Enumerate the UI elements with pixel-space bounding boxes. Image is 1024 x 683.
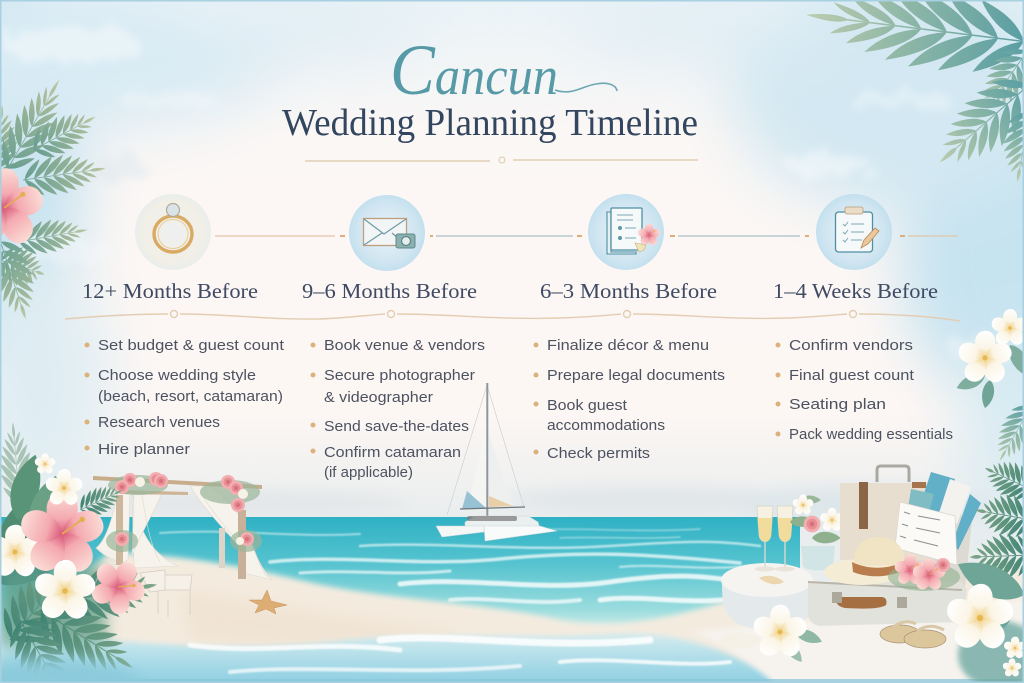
checklist items (84, 338, 284, 458)
vase bouquet (790, 494, 845, 570)
wave foam (160, 529, 760, 602)
icon: envelope and camera (349, 195, 425, 271)
champagne glasses (755, 506, 795, 572)
checklist items: Send save-the-dates (324, 419, 469, 435)
checklist items: & videographer (324, 390, 433, 406)
checklist items: Secure photographer (324, 368, 475, 384)
checklist items: Book venue & vendors (324, 338, 485, 354)
checklist items: Check permits (547, 446, 650, 462)
lid (900, 500, 972, 588)
hibiscus blooms (0, 525, 44, 580)
wedding arch (93, 472, 272, 617)
table with glasses and vase (721, 494, 845, 629)
checklist items: Set budget & guest count (98, 338, 284, 354)
icon: ring (135, 194, 211, 270)
checklist items: Prepare legal documents (547, 368, 725, 384)
script word Cancun: Cancun (390, 30, 558, 110)
checklist items (534, 338, 725, 462)
chair (140, 570, 192, 617)
step heading: 9–6 Months Before (302, 279, 477, 303)
checklist items: Confirm vendors (789, 338, 913, 354)
flower on sand (718, 605, 824, 665)
top right palm fronds (801, 0, 1024, 185)
checklist items: Research venues (98, 415, 220, 431)
title (282, 30, 698, 163)
checklist (895, 502, 957, 565)
sand (0, 552, 1024, 683)
icon: documents and flower (588, 194, 664, 270)
sea (0, 517, 800, 632)
handle (877, 466, 909, 482)
catamaran (436, 383, 557, 541)
flowers in case (888, 554, 960, 592)
checklist items: Final guest count (789, 368, 914, 384)
checklist items: Confirm catamaran (324, 445, 461, 461)
checklist items: Hire planner (98, 442, 190, 458)
checklist items: Finalize décor & menu (547, 338, 709, 354)
timeline wavy divider (65, 310, 960, 321)
checklist items: (if applicable) (324, 465, 413, 481)
curtains (96, 486, 272, 580)
straw hat (824, 537, 906, 585)
flip flops (880, 622, 946, 648)
step heading: 1–4 Weeks Before (773, 279, 938, 303)
checklist items (776, 338, 953, 443)
tickets (908, 472, 981, 550)
icon: clipboard and pencil (816, 194, 892, 270)
arch flowers (106, 472, 262, 552)
checklist items: Seating plan (789, 397, 886, 413)
checklist items: accommodations (547, 418, 665, 434)
starfish (249, 590, 287, 614)
checklist items: Choose wedding style (98, 368, 256, 384)
column: 6-3 months before (534, 279, 725, 462)
column: 1-4 weeks before (773, 279, 953, 443)
checklist items: Pack wedding essentials (789, 427, 953, 443)
suitcase (718, 466, 981, 665)
checklist items: (beach, resort, catamaran) (98, 389, 283, 405)
shore water (0, 630, 780, 683)
bottom left tropical bouquet (0, 421, 161, 683)
title divider (305, 157, 698, 163)
checklist items (310, 338, 485, 481)
column: 12+ months before (82, 279, 284, 458)
heading: Wedding Planning Timeline (282, 102, 698, 144)
timeline connector (215, 235, 958, 237)
column: 9-6 months before (302, 279, 485, 481)
left palm fronds and hibiscus (0, 70, 108, 326)
step heading: 6–3 Months Before (540, 279, 717, 303)
checklist items: Book guest (547, 398, 627, 414)
step heading: 12+ Months Before (82, 279, 258, 303)
right side flowers and leaves (944, 309, 1024, 683)
